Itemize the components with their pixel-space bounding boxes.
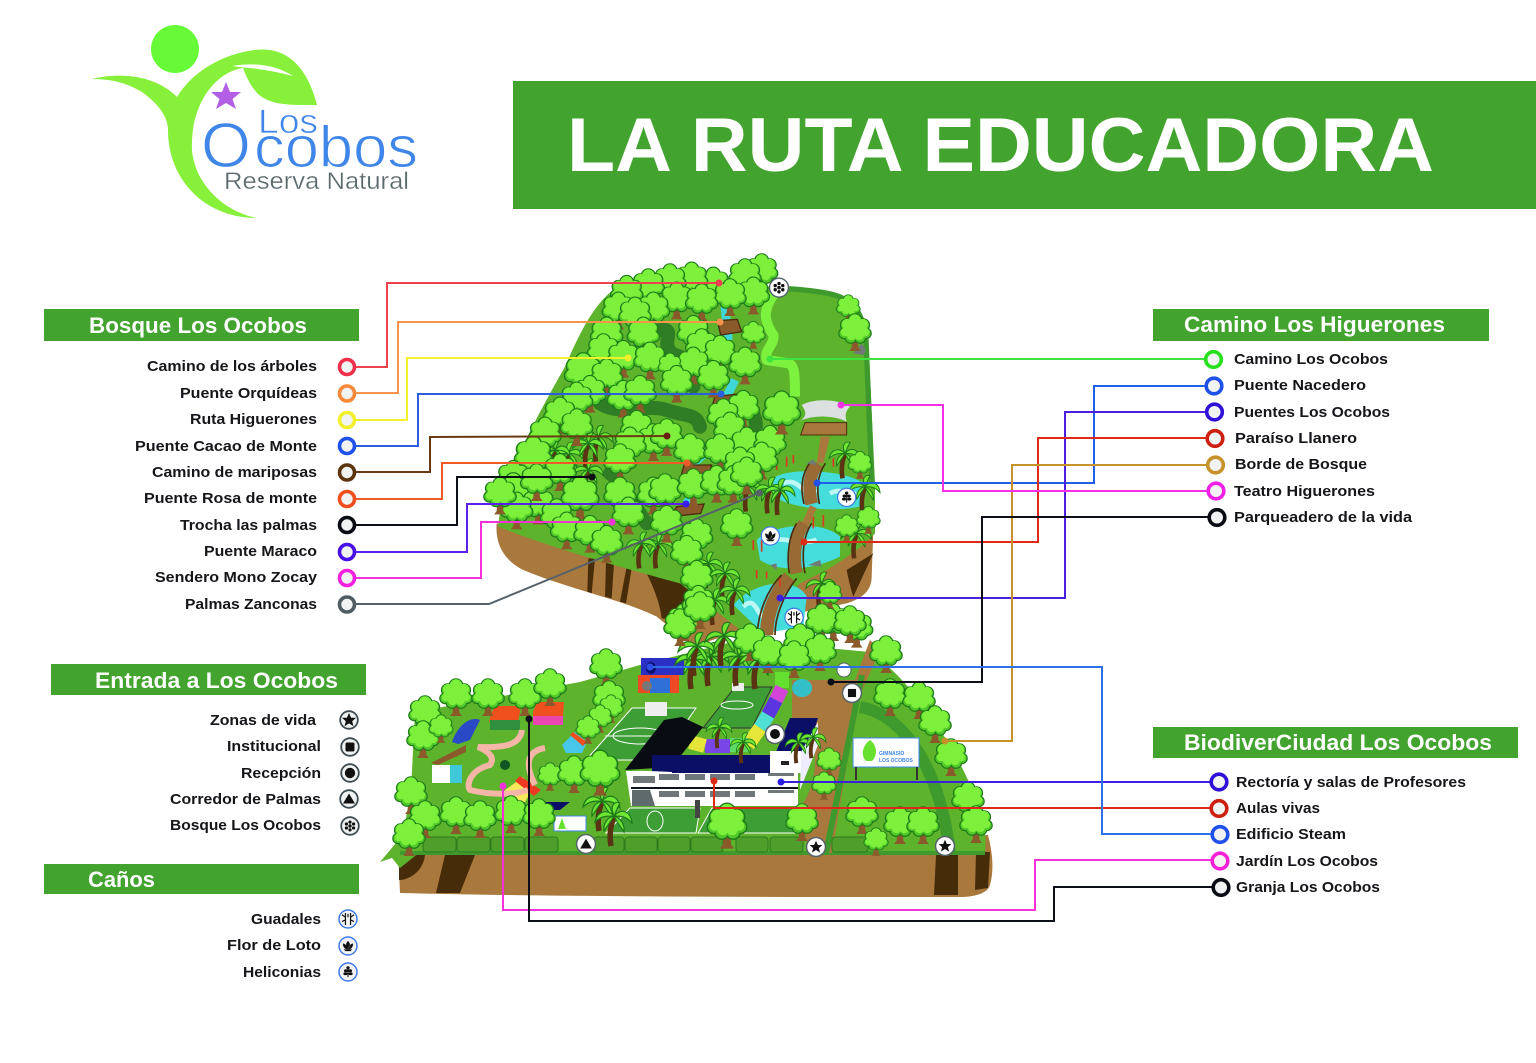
- item: Flor de Loto: [227, 937, 357, 955]
- line: Puente Nacedero: [814, 386, 1214, 486]
- upper island ground: [498, 280, 875, 640]
- item: Institucional: Institucional: [227, 738, 321, 755]
- item: Guadales: [251, 910, 357, 928]
- dark green curved path: [860, 707, 950, 853]
- item: Puentes Los Ocobos: Puentes Los Ocobos: [1234, 404, 1390, 421]
- line: Sendero Mono Zocay: [347, 518, 616, 578]
- item: Aulas vivas: Aulas vivas: [1236, 800, 1320, 817]
- large school sign: GIMNASIO: [879, 751, 904, 757]
- large school sign: LOS OCOBOS: [879, 758, 914, 764]
- item: Camino de los árboles: Camino de los árboles: [147, 358, 317, 375]
- logo star: [211, 82, 241, 109]
- fenced soccer field: [703, 683, 772, 728]
- school wing: [770, 718, 818, 790]
- item: Edificio Steam: Edificio Steam: [1236, 826, 1346, 843]
- leader lines: [347, 280, 1221, 921]
- panel: Bosque Los Ocobos: [44, 309, 359, 613]
- upper soccer field: [586, 702, 696, 760]
- line: Camino de los árboles: [347, 280, 722, 367]
- upper island soil: [496, 523, 873, 647]
- heading: BiodiverCiudad Los Ocobos: [1153, 727, 1518, 758]
- logo: Los Ocobos Reserva Natural: [92, 25, 418, 218]
- entrance road: [792, 640, 880, 853]
- logo swoosh body and leaf: [92, 49, 317, 218]
- map: lower campus island: [380, 591, 993, 897]
- item: Heliconias: Heliconias: [243, 964, 321, 981]
- item: Zonas de vida: [210, 711, 358, 729]
- line: Paraíso Llanero: [800, 438, 1215, 546]
- forest tree canopy: [483, 253, 881, 648]
- forest floor dark paths: [600, 330, 756, 523]
- item: Sendero Mono Zocay: Sendero Mono Zocay: [155, 569, 318, 586]
- lower island soil: [398, 835, 992, 897]
- logo figure head: [151, 25, 199, 73]
- map pins upper: [761, 278, 856, 626]
- line: Teatro Higuerones: [838, 402, 1216, 491]
- item: Ruta Higuerones: Ruta Higuerones: [190, 411, 317, 428]
- hedges: [423, 837, 868, 852]
- item: Heliconias: [243, 963, 357, 981]
- heading: Entrada a Los Ocobos: [51, 664, 366, 695]
- item: Corredor de Palmas: Corredor de Palmas: [170, 791, 321, 808]
- colored ribbon path: [690, 672, 782, 746]
- ponds: [733, 471, 863, 633]
- item: Jardín Los Ocobos: Jardín Los Ocobos: [1236, 853, 1378, 870]
- item: Parqueadero de la vida: Parqueadero de la vida: [1234, 509, 1413, 526]
- line: Borde de Bosque: [942, 465, 1215, 744]
- item: Paraíso Llanero: Paraíso Llanero: [1235, 430, 1357, 447]
- line: Puente Cacao de Monte: [347, 390, 724, 446]
- panel: BiodiverCiudad Los Ocobos: [1153, 727, 1518, 896]
- line: Camino de mariposas: [347, 432, 670, 472]
- item: Puente Orquídeas: Puente Orquídeas: [180, 385, 317, 402]
- item: Teatro Higuerones: Teatro Higuerones: [1234, 483, 1375, 500]
- line: Rectoría y salas de Profesores: [778, 778, 1219, 786]
- item: Zonas de vida: Zonas de vida: [210, 712, 317, 729]
- item: Granja Los Ocobos: Granja Los Ocobos: [1236, 879, 1380, 896]
- bright walking path: [766, 295, 795, 397]
- small forest bridges: [671, 319, 742, 517]
- item: Puente Nacedero: Puente Nacedero: [1234, 377, 1366, 394]
- item: Guadales: Guadales: [251, 911, 321, 928]
- heading: Bosque Los Ocobos: Bosque Los Ocobos: [89, 313, 307, 338]
- upper island right edge: [780, 288, 872, 483]
- pond highlights: [743, 482, 857, 617]
- item: Institucional: [227, 738, 359, 756]
- item: Bosque Los Ocobos: Bosque Los Ocobos: [170, 817, 321, 834]
- item: Palmas Zanconas: Palmas Zanconas: [185, 596, 317, 613]
- line: Puente Rosa de monte: [347, 460, 690, 499]
- small farm buildings: [431, 702, 587, 810]
- vine at left: [380, 837, 420, 868]
- title: LA RUTA EDUCADORA: [567, 103, 1434, 188]
- heading: BiodiverCiudad Los Ocobos: BiodiverCiudad Los Ocobos: [1184, 730, 1492, 755]
- upper island roots: [587, 553, 873, 620]
- line: Puentes Los Ocobos: [776, 412, 1214, 602]
- heading: Camino Los Higuerones: [1153, 309, 1489, 341]
- line: Edificio Steam: [646, 664, 1220, 834]
- garden pink path: [469, 730, 545, 794]
- line: Ruta Higuerones: [347, 354, 632, 420]
- item: Camino de mariposas: Camino de mariposas: [152, 464, 317, 481]
- heading: Caños: Caños: [88, 867, 155, 892]
- map pins lower: [577, 663, 954, 856]
- pond reeds: [753, 455, 833, 587]
- streams in forest: [687, 307, 735, 503]
- panel: Entrada a Los Ocobos: [51, 664, 366, 835]
- item: Recepción: Recepción: [241, 765, 321, 782]
- item: Rectoría y salas de Profesores: Rectoría y salas de Profesores: [1236, 774, 1466, 791]
- item: Puente Rosa de monte: Puente Rosa de monte: [144, 490, 317, 507]
- item: Flor de Loto: Flor de Loto: [227, 937, 321, 954]
- line: Trocha las palmas: [347, 474, 596, 525]
- line: Puente Maraco: [347, 500, 690, 552]
- ground edge: [400, 851, 985, 855]
- theatre path: [817, 437, 830, 463]
- item: Puente Cacao de Monte: Puente Cacao de Monte: [135, 438, 317, 455]
- black roof: [625, 717, 703, 770]
- line: Parqueadero de la vida: [828, 517, 1217, 686]
- item: Puente Maraco: Puente Maraco: [204, 543, 317, 560]
- palms near ponds: [539, 425, 880, 625]
- large school sign: [853, 738, 919, 780]
- lower island roots: [399, 852, 990, 895]
- pond bridges: [757, 463, 825, 635]
- panel: Camino Los Higuerones: [1153, 309, 1489, 526]
- teatro Higuerones stage: [801, 400, 850, 435]
- heading: Entrada a Los Ocobos: Entrada a Los Ocobos: [95, 668, 338, 693]
- garden pond centre: [500, 760, 510, 770]
- Steam building: [638, 658, 684, 693]
- line: Jardín Los Ocobos: [500, 782, 1220, 910]
- small sign: [554, 816, 586, 831]
- trees lower: [392, 591, 993, 856]
- main school building: [626, 755, 798, 806]
- heading: Camino Los Higuerones: Camino Los Higuerones: [1184, 312, 1445, 337]
- heading: Caños: [44, 864, 359, 894]
- title banner: [513, 81, 1536, 209]
- map: upper forest island: [483, 253, 881, 648]
- line: Granja Los Ocobos: [526, 716, 1221, 921]
- line: Palmas Zanconas: [347, 490, 762, 604]
- logo text cobos: cobos: [254, 115, 418, 180]
- item: Trocha las palmas: Trocha las palmas: [180, 517, 317, 534]
- item: Borde de Bosque: Borde de Bosque: [1235, 456, 1367, 473]
- lower island ground: [400, 640, 986, 854]
- logo text Los: Los: [258, 103, 318, 141]
- line: Puente Orquídeas: [347, 318, 724, 393]
- logo text Reserva Natural: Reserva Natural: [224, 168, 409, 195]
- item: Recepción: [241, 764, 359, 782]
- lower soccer fields: [606, 800, 795, 833]
- logo leaf vein: [232, 64, 293, 76]
- item: Camino Los Ocobos: Camino Los Ocobos: [1234, 351, 1388, 368]
- palms lower: [583, 623, 826, 846]
- rocks: [770, 343, 866, 570]
- line: Aulas vivas: [710, 778, 1219, 808]
- parked car: [792, 679, 812, 697]
- line: Camino Los Ocobos: [766, 356, 1214, 362]
- logo text big O: O: [201, 111, 251, 181]
- road edge: [826, 675, 862, 853]
- panel: Caños: [44, 864, 359, 981]
- heading: Bosque Los Ocobos: [44, 309, 359, 341]
